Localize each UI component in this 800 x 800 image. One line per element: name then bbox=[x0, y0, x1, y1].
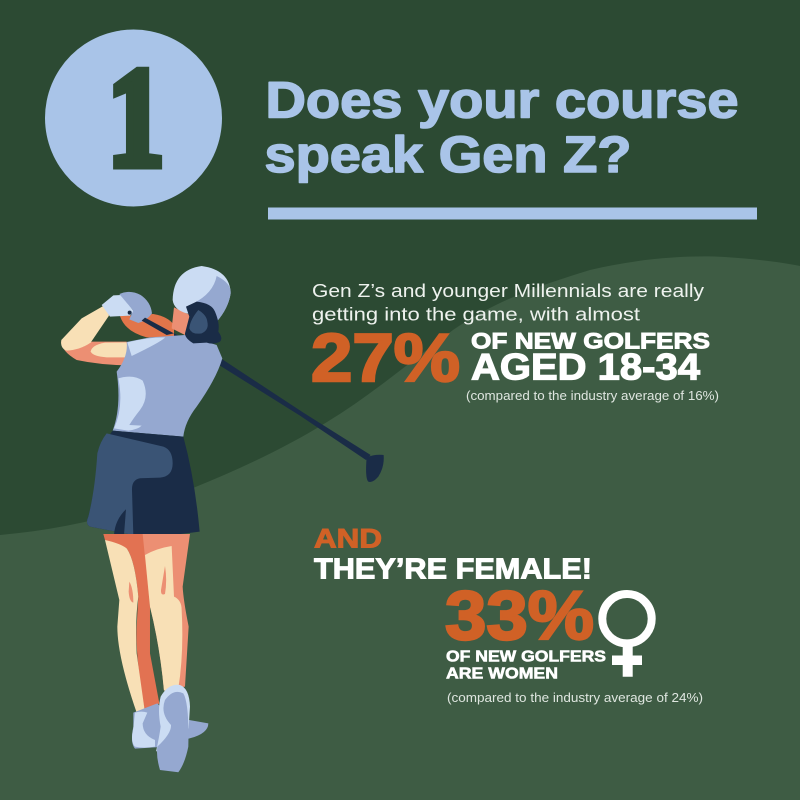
intro text bbox=[312, 281, 704, 324]
title bbox=[264, 72, 738, 183]
icon: female symbol bbox=[602, 594, 652, 677]
upper body bbox=[61, 266, 231, 437]
skirt bbox=[87, 431, 200, 536]
stat label: new golfers women: OF NEW GOLFERS bbox=[446, 648, 606, 666]
intro text: Gen Z’s and younger Millennials are really bbox=[312, 281, 704, 301]
golfer illustration bbox=[61, 266, 384, 772]
stat: 33%: 33% bbox=[445, 577, 594, 654]
stat label: new golfers aged 18-34 bbox=[471, 328, 710, 388]
stat label: new golfers aged 18-34: OF NEW GOLFERS bbox=[471, 328, 710, 354]
intro text: getting into the game, with almost bbox=[312, 304, 640, 324]
stat label: new golfers women bbox=[446, 648, 606, 682]
number badge bbox=[45, 30, 222, 206]
green hill bbox=[0, 256, 800, 800]
comparison note 16%: (compared to the industry average of 16%) bbox=[466, 389, 719, 403]
heading: and they're female: THEY’RE FEMALE! bbox=[314, 554, 592, 586]
heading: and they're female bbox=[314, 524, 592, 586]
heading: and they're female: AND bbox=[314, 524, 382, 554]
title rule bbox=[268, 208, 757, 220]
stat label: new golfers aged 18-34: AGED 18-34 bbox=[471, 346, 700, 388]
title: speak Gen Z? bbox=[264, 126, 632, 183]
title: Does your course bbox=[266, 72, 738, 128]
club bbox=[142, 318, 384, 482]
legs and shoes bbox=[103, 534, 208, 772]
comparison note 24%: (compared to the industry average of 24%) bbox=[447, 691, 703, 705]
stat label: new golfers women: ARE WOMEN bbox=[446, 666, 558, 682]
number badge: 1 bbox=[108, 38, 164, 196]
stat: 27%: 27% bbox=[311, 320, 460, 396]
